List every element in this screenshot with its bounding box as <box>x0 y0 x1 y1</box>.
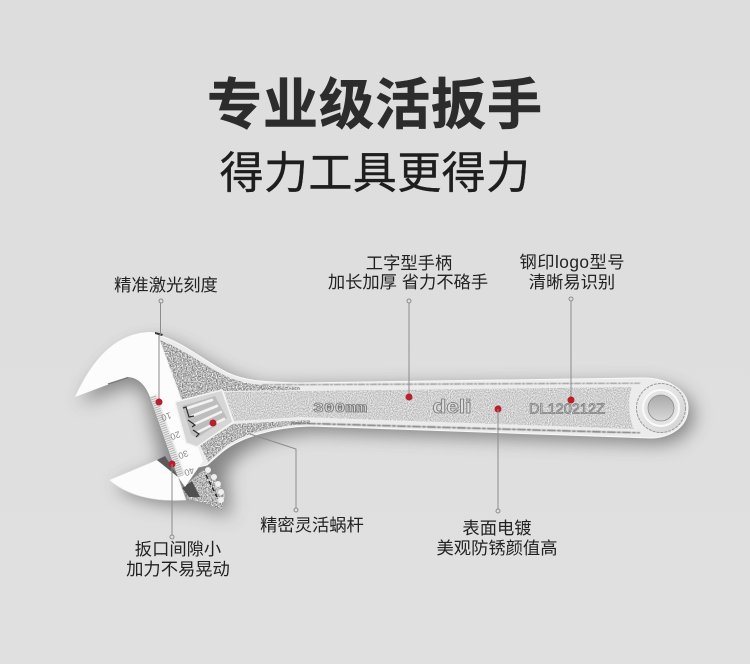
engraved brand logo: deli <box>432 397 472 418</box>
callout: laser scale: 精准激光刻度 <box>114 275 218 295</box>
callout: surface plating <box>437 406 557 558</box>
callout: steel stamp logo: 钢印logo型号 <box>520 252 624 272</box>
ruler scale: 40 <box>183 465 196 478</box>
ruler scale: 30 <box>177 448 190 461</box>
callout: worm gear: 精密灵活蜗杆 <box>260 515 364 535</box>
engraved model number: DL120212Z <box>529 400 605 418</box>
callout: I-beam handle <box>328 253 488 400</box>
ruler scale: 10 <box>160 410 173 423</box>
lower jaw dark gap <box>157 456 178 477</box>
ruler scale: 20 <box>169 429 182 442</box>
callout: surface plating: 美观防锈颜值高 <box>437 538 557 558</box>
callout: jaw gap <box>126 460 230 579</box>
wrench shadow <box>81 341 694 516</box>
subtitle: 得力工具更得力 <box>220 149 530 198</box>
lower jaw <box>109 460 186 500</box>
callout: I-beam handle: 工字型手柄 <box>366 253 452 273</box>
handle centre panel <box>224 387 634 429</box>
callout: surface plating: 表面电镀 <box>462 518 532 538</box>
moving jaw and bar <box>75 332 203 487</box>
engraved size text: 300mm <box>313 401 367 417</box>
callout: steel stamp logo: 清晰易识别 <box>529 272 615 292</box>
worm teeth <box>182 467 225 510</box>
handle lower edge strip <box>292 423 640 433</box>
jaw inner shade <box>108 378 128 384</box>
callout: jaw gap: 加力不易晃动 <box>126 559 230 579</box>
hanging ring <box>636 384 686 432</box>
lower body texture <box>200 420 310 462</box>
ruler scale <box>150 394 196 478</box>
callout: steel stamp logo <box>520 252 624 404</box>
callout: jaw gap: 扳口间隙小 <box>135 539 221 559</box>
title: 专业级活扳手 <box>207 74 543 136</box>
wrench <box>75 332 694 516</box>
callout: laser scale <box>114 275 218 406</box>
callout: worm gear <box>210 420 364 535</box>
top notch <box>155 332 163 336</box>
callout: I-beam handle: 加长加厚 省力不硌手 <box>328 272 488 292</box>
handle and body <box>158 335 688 470</box>
worm housing <box>175 390 233 447</box>
upper body texture <box>160 340 300 403</box>
handle edge strips <box>262 383 640 385</box>
